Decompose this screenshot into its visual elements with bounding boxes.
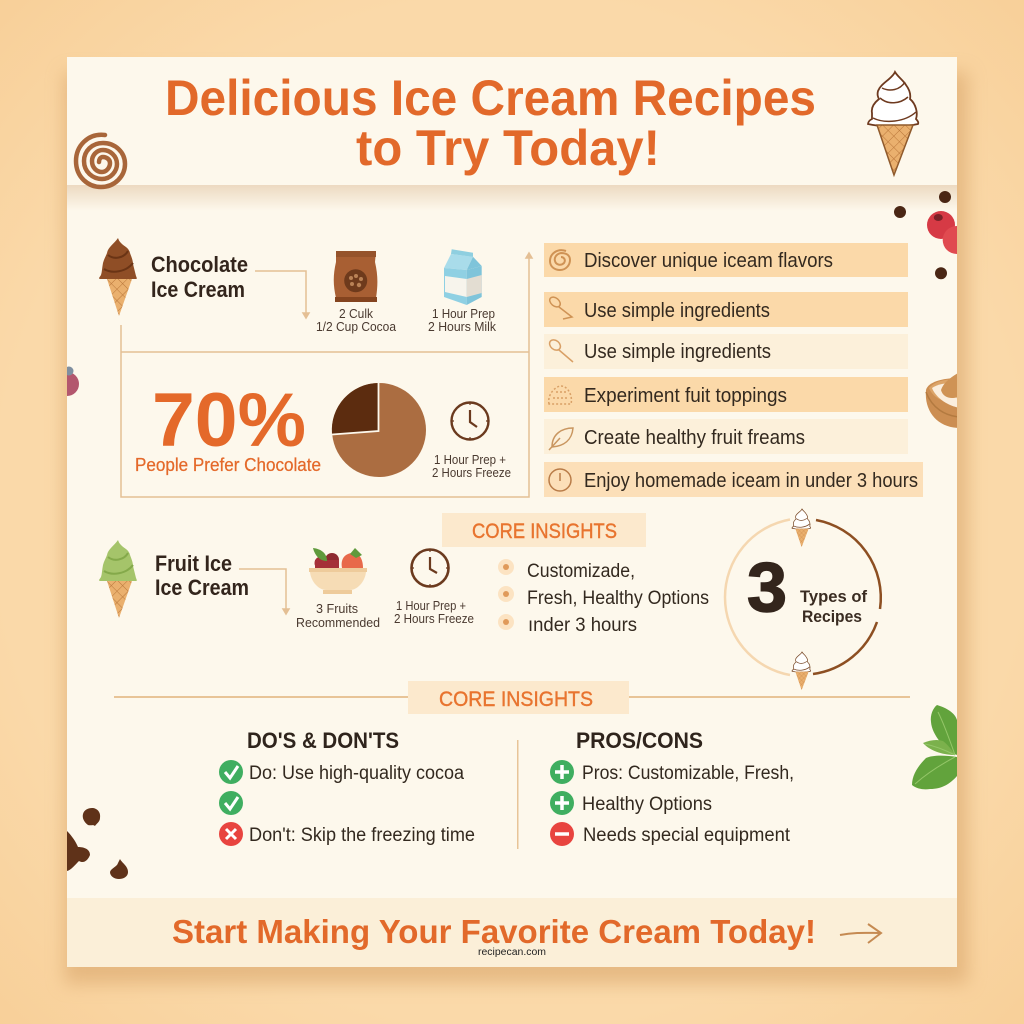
title: Delicious Ice Cream Recipes (165, 70, 816, 126)
don't item: Don't: Skip the freezing time (249, 825, 475, 846)
badge: core insights upper: CORE INSIGHTS (472, 520, 617, 543)
main panel (67, 57, 957, 967)
tip: time: Enjoy homemade iceam in under 3 hours (584, 470, 918, 492)
tip: fruit (544, 419, 908, 454)
text: fruit prep time: 2 Hours Freeze (394, 612, 474, 626)
icon: bottom cone (792, 652, 811, 690)
text: prep and freeze: 2 Hours Freeze (432, 466, 511, 480)
heading: fruit ice cream: Ice Cream (155, 575, 249, 600)
icon: clock (452, 402, 488, 440)
tip: fruit: Create healthy fruit freams (584, 427, 805, 449)
stat: 70 percent: People Prefer Chocolate (135, 455, 321, 475)
text: milk prep: 1 Hour Prep (432, 307, 495, 321)
do item one: Do: Use high-quality cocoa (249, 763, 464, 784)
panel: pros and cons (550, 728, 794, 846)
bullet list: Customizade, (527, 561, 635, 582)
text: prep and freeze (432, 453, 511, 480)
text: cocoa amounts (316, 307, 396, 334)
con item: Needs special equipment (583, 825, 791, 846)
tip: ingredients: Use simple ingredients (584, 300, 770, 322)
stat: 70 percent: 70% (152, 378, 306, 463)
ring: three types of recipes (725, 509, 881, 690)
bullet list (498, 559, 709, 636)
text: cocoa amounts: 1/2 Cup Cocoa (316, 320, 396, 334)
text: cocoa amounts: 2 Culk (339, 307, 374, 321)
heading: PROS/CONS (576, 728, 703, 753)
tip: ingredients again (544, 334, 908, 369)
text: fruits recommended: 3 Fruits (316, 601, 358, 616)
tip: toppings: Experiment fuit toppings (584, 385, 787, 407)
text: fruit prep time: 1 Hour Prep + (396, 599, 466, 613)
icon: green cone (99, 540, 137, 618)
tip: toppings (544, 377, 908, 412)
panel: do's and don'ts (219, 728, 475, 846)
title (165, 70, 816, 176)
icon: milk carton (444, 249, 482, 305)
connector lines (121, 253, 532, 614)
source credit: recipecan.com (478, 947, 546, 958)
text: fruit prep time (394, 599, 474, 626)
text: fruits recommended: Recommended (296, 615, 380, 630)
title: to Try Today! (356, 120, 660, 176)
almond bowl (926, 372, 960, 428)
pro item two (550, 791, 712, 815)
tip: ingredients (544, 292, 908, 327)
ring label (800, 587, 867, 626)
number three: 3 (747, 548, 787, 626)
ring label: Recipes (802, 607, 862, 626)
call to action: Start Making Your Favorite Cream Today! (172, 913, 816, 950)
icon: clock fruit (412, 550, 448, 586)
heading: DO'S & DON'TS (247, 728, 399, 753)
icon: cocoa bag (334, 251, 377, 302)
mint leaves (912, 705, 957, 789)
tip: ingredients again: Use simple ingredients (584, 341, 771, 363)
heading: chocolate ice cream: Chocolate (151, 252, 248, 277)
text: milk prep: 2 Hours Milk (428, 320, 497, 334)
tips list (544, 243, 923, 497)
pro item two: Healthy Options (582, 794, 712, 815)
column divider (517, 740, 518, 849)
ring label: Types of (800, 587, 867, 606)
icon: vanilla cone (868, 72, 918, 175)
bullet list: Fresh, Healthy Options (527, 588, 709, 609)
left berry (67, 366, 79, 396)
header shadow (67, 185, 957, 211)
icon: fruit bowl (309, 548, 367, 594)
red berries (927, 211, 957, 254)
chocolate chips top right (894, 191, 951, 279)
text: fruits recommended (296, 601, 380, 630)
heading: fruit ice cream: Fruit Ice (155, 551, 232, 576)
panel shadow (64, 72, 968, 984)
arrow (840, 924, 881, 943)
tip: flavors (544, 243, 908, 277)
pie chart (332, 383, 426, 477)
tip: time (544, 462, 923, 497)
divider with badge (114, 681, 910, 714)
pro item one: Pros: Customizable, Fresh, (582, 763, 794, 784)
decorations: toppings at panel edges (55, 191, 971, 879)
chocolate chips bottom left (67, 808, 128, 879)
badge: core insights upper (442, 513, 646, 547)
heading: fruit ice cream (155, 551, 249, 600)
icon: caramel swirl (76, 135, 125, 187)
bullet list: ınder 3 hours (528, 615, 637, 636)
icon: chocolate cone (99, 238, 137, 316)
text: prep and freeze: 1 Hour Prep + (434, 453, 506, 467)
text: milk prep (428, 307, 497, 334)
heading: chocolate ice cream: Ice Cream (151, 277, 245, 302)
footer band (67, 898, 957, 967)
icon: top cone (792, 509, 811, 547)
do item two (219, 791, 243, 815)
heading: chocolate ice cream (151, 252, 248, 302)
tip: flavors: Discover unique iceam flavors (584, 250, 833, 272)
divider with badge: CORE INSIGHTS (439, 688, 593, 711)
